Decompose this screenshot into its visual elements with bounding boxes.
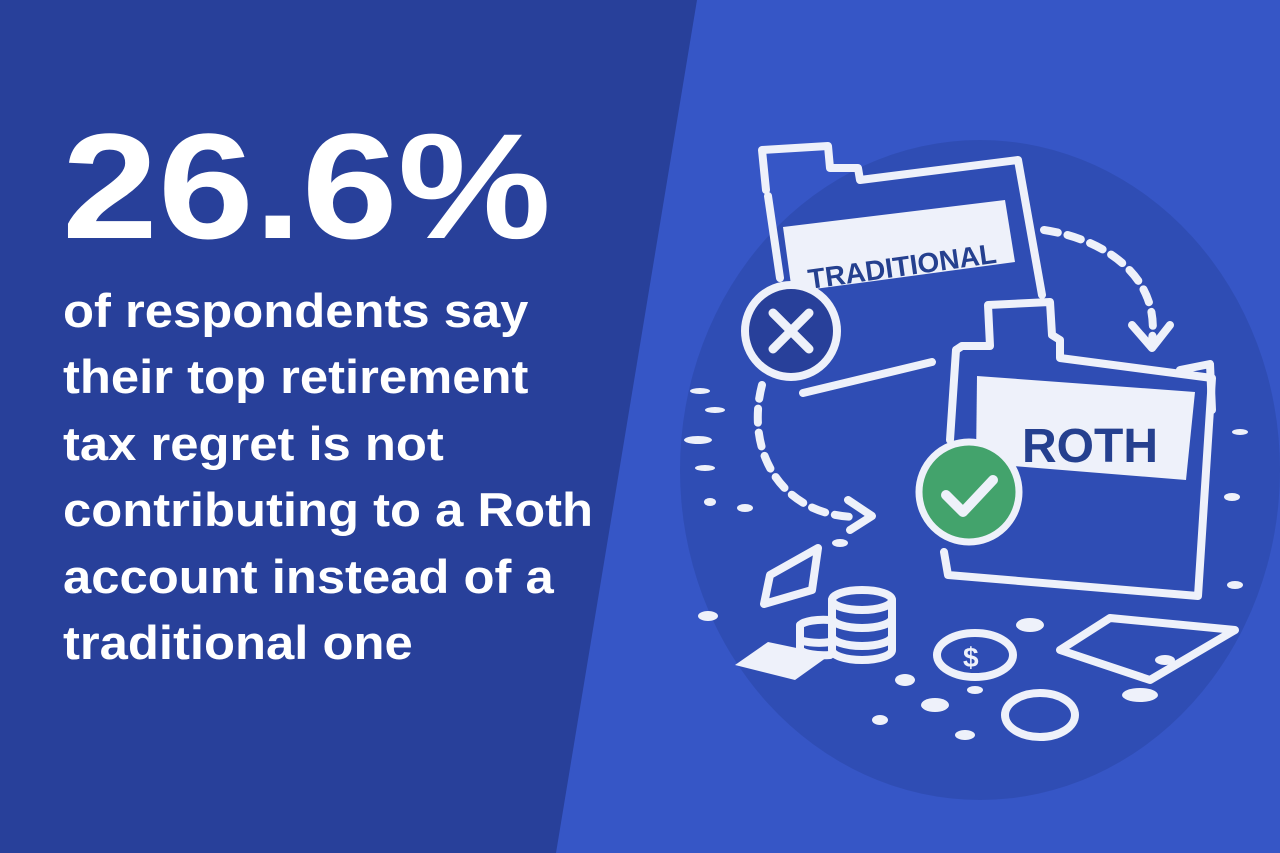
roth folder: [944, 302, 1212, 596]
coins and bills: [735, 548, 1235, 737]
traditional folder: TRADITIONAL: [806, 238, 998, 295]
icon: x circle: [745, 285, 837, 377]
arrow: dashed left: [758, 385, 855, 517]
description text: of respondents say: [63, 284, 528, 337]
description text: their top retirement: [63, 350, 528, 403]
arrow: dashed top: [1044, 230, 1153, 340]
traditional folder: [762, 146, 1042, 393]
description text: contributing to a Roth: [63, 483, 593, 536]
description text: traditional one: [63, 616, 413, 669]
decorative dots: [684, 388, 1248, 740]
headline stat: 26.6%: [62, 102, 551, 270]
description text: [63, 284, 593, 669]
coins and bills: $: [963, 642, 979, 673]
description text: tax regret is not: [63, 417, 444, 470]
description text: account instead of a: [63, 550, 554, 603]
icon: check circle: [919, 442, 1019, 542]
roth folder: ROTH: [1022, 420, 1158, 473]
